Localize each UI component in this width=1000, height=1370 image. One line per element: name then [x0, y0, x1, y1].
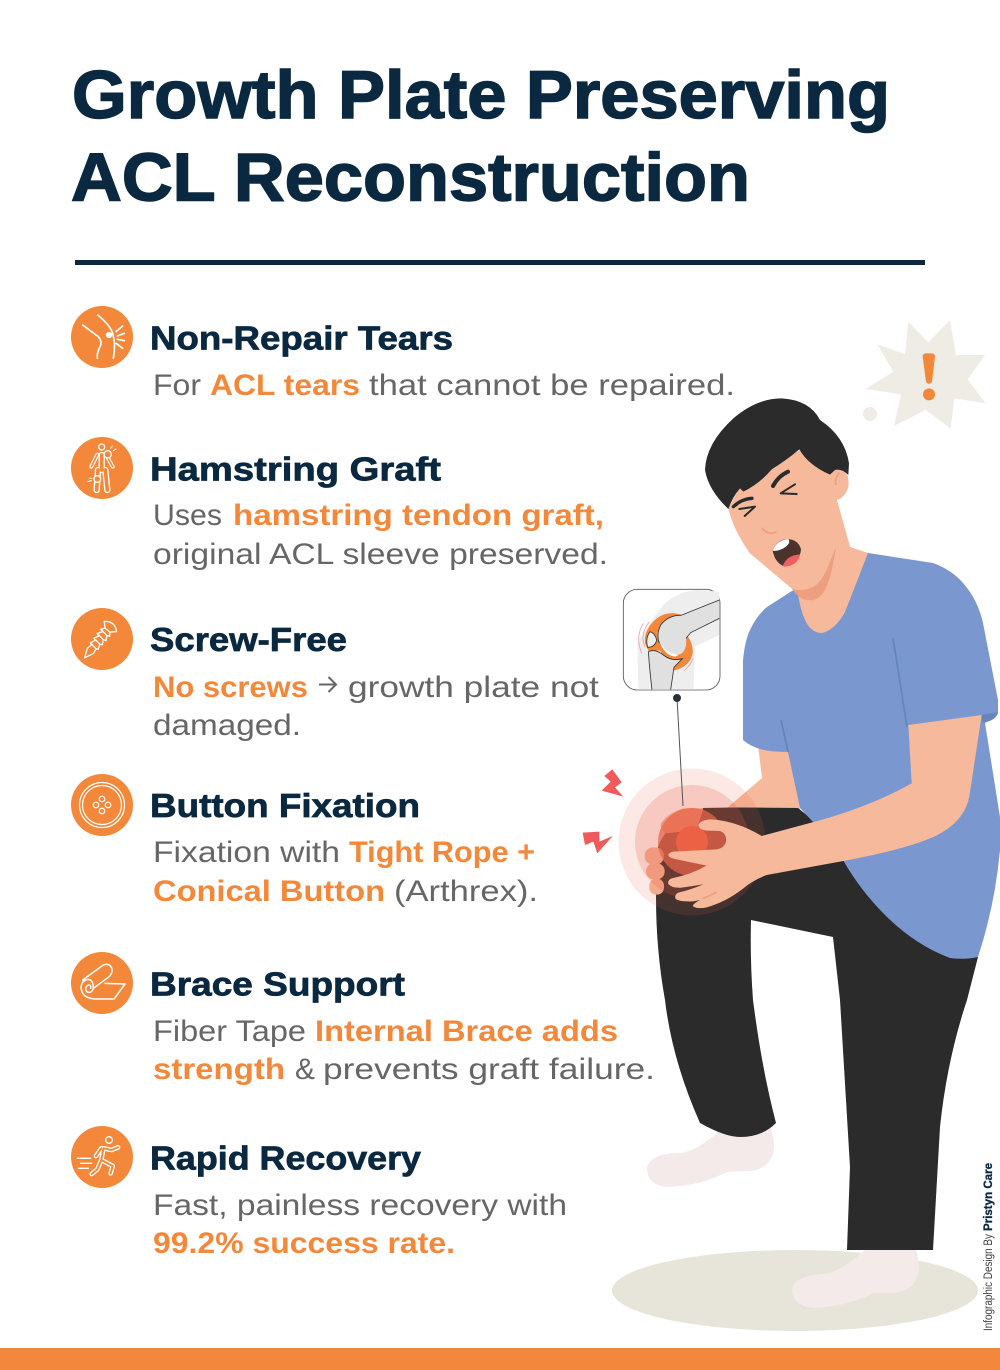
head [705, 398, 850, 600]
description: No screws [153, 671, 308, 704]
description: prevents graft failure. [323, 1053, 655, 1086]
heading: Hamstring Graft [150, 450, 441, 488]
description: hamstring tendon graft, [233, 499, 604, 532]
heading: Brace Support [150, 966, 405, 1002]
item: Hamstring Graft [71, 437, 608, 571]
description: Tight Rope + [349, 836, 535, 869]
title: Growth Plate Preserving [72, 57, 890, 133]
icon: body with joints [71, 437, 133, 499]
near arm and hand [668, 715, 982, 908]
item: Rapid Recovery [71, 1126, 567, 1260]
title: ACL Reconstruction [71, 140, 750, 216]
ground shadow [612, 1250, 978, 1331]
description [153, 1189, 567, 1260]
description: that cannot be repaired. [369, 369, 735, 402]
hair [705, 398, 849, 509]
knee anatomy inset [623, 589, 720, 690]
shirt [743, 553, 1000, 959]
description: Fixation with [153, 836, 340, 869]
description: For [153, 369, 201, 402]
description: Fiber Tape [153, 1015, 306, 1048]
heading: Rapid Recovery [150, 1140, 422, 1176]
description: Conical Button [153, 875, 385, 908]
item: Button Fixation [71, 774, 538, 908]
trousers [656, 808, 978, 1250]
far arm [705, 745, 800, 830]
item: Non-Repair Tears [71, 306, 735, 402]
icon: screw [71, 608, 133, 670]
description: (Arthrex). [394, 875, 538, 908]
description: growth plate not [348, 671, 600, 704]
description: & [295, 1053, 315, 1086]
icon: tape roll [71, 952, 133, 1014]
description: original ACL sleeve preserved. [153, 538, 608, 571]
description [153, 671, 600, 742]
description: 99.2% success rate. [153, 1227, 455, 1260]
face [728, 450, 850, 590]
knee fingers under pain glow [645, 808, 703, 895]
heading: Screw-Free [150, 621, 347, 658]
ear [830, 469, 849, 500]
kneecap and femur cartilage [645, 613, 693, 671]
feet [647, 1125, 919, 1308]
description [153, 1015, 655, 1086]
illustration: person holding painful knee [583, 320, 1000, 1331]
thought burst with exclamation mark [863, 320, 986, 428]
item: Brace Support [71, 952, 655, 1086]
description: strength [153, 1053, 285, 1086]
pain glow circles [618, 768, 766, 916]
item: Screw-Free [71, 608, 600, 742]
icon: runner [71, 1126, 133, 1188]
title [71, 57, 890, 216]
nose [762, 528, 776, 533]
credit: Infographic Design By [983, 1234, 995, 1331]
mouth [773, 539, 801, 567]
hand crease [703, 892, 717, 899]
description: Uses [153, 499, 222, 532]
sleeve cuff and shirt folds [781, 638, 907, 752]
neck [790, 500, 868, 633]
heading: Button Fixation [150, 787, 420, 824]
description: damaged. [153, 709, 301, 742]
icon: arrow [319, 677, 336, 692]
description [153, 369, 735, 402]
brows and eyes [733, 472, 797, 516]
credit [983, 1163, 995, 1331]
pointer line to knee inset [673, 694, 683, 806]
description [153, 836, 538, 908]
icon: knee joint pain [71, 306, 133, 368]
description: Fast, painless recovery with [153, 1189, 567, 1222]
icon: button [71, 774, 133, 836]
heading: Non-Repair Tears [150, 320, 453, 356]
pain bolts [583, 769, 623, 853]
footer bar [0, 1348, 1000, 1370]
description: ACL tears [210, 369, 360, 402]
description: Internal Brace adds [315, 1015, 618, 1048]
credit: Pristyn Care [983, 1163, 995, 1231]
description [153, 499, 608, 571]
